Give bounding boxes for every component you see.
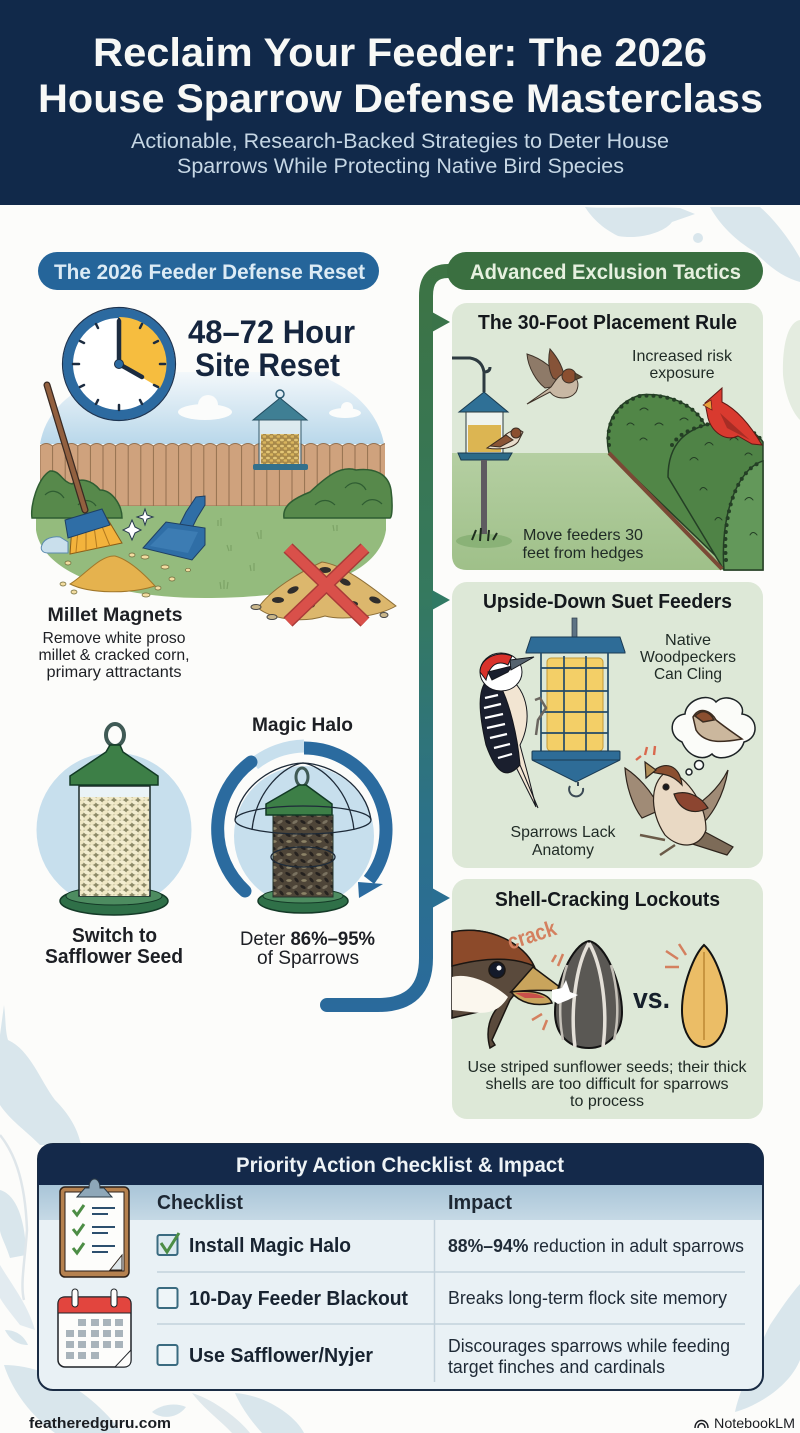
text: millet magnets: [38, 605, 190, 681]
heading: Shell-Cracking Lockouts: [495, 888, 720, 911]
labels: Move feeders 30: [523, 527, 643, 544]
sparkles: [123, 509, 153, 540]
illustration: backyard reset scene: [32, 372, 396, 622]
heading: magic halo: Magic Halo: [252, 715, 353, 736]
lawn: [452, 453, 763, 570]
sparrow head: [452, 930, 565, 1048]
caption: [468, 1059, 748, 1110]
perched sparrow: [487, 428, 523, 449]
suet feeder: [526, 618, 625, 796]
table header: Impact: [448, 1192, 512, 1214]
title: House Sparrow Defense Masterclass: [38, 77, 763, 121]
table header: [39, 1185, 762, 1220]
caption: Use striped sunflower seeds; their thick: [468, 1059, 748, 1076]
small hanging feeder: [253, 390, 308, 470]
row: install magic halo: [158, 1233, 744, 1257]
text: switch to safflower seed: Switch to: [72, 925, 157, 947]
labels: Woodpeckers: [640, 649, 736, 666]
illustration: safflower feeder: [36, 724, 192, 915]
row: safflower and nyjer: Discourages sparrows while feeding: [448, 1336, 730, 1356]
pale seed: [665, 944, 727, 1047]
heading: site reset: [188, 314, 355, 383]
panel: upside-down suet feeders: [452, 582, 763, 868]
row: safflower and nyjer: target finches and cardinals: [448, 1357, 665, 1377]
section pill: feeder defense reset: The 2026 Feeder Defense Reset: [54, 261, 365, 284]
text: millet magnets: Millet Magnets: [48, 605, 182, 626]
panel: 30-foot placement rule: [452, 303, 763, 570]
hanging feeder: [452, 358, 512, 548]
labels: [510, 632, 736, 859]
row: feeder blackout: 10-Day Feeder Blackout: [189, 1288, 408, 1310]
label: vs.: vs.: [633, 983, 670, 1015]
subtitle: Sparrows While Protecting Native Bird Species: [177, 154, 624, 178]
labels: Increased risk: [632, 348, 733, 365]
broom: [41, 385, 122, 554]
checklist title: Priority Action Checklist & Impact: [236, 1154, 564, 1177]
alarmed sparrow: [625, 746, 733, 855]
millet pile: [60, 553, 190, 597]
heading: Upside-Down Suet Feeders: [483, 590, 732, 613]
labels: Anatomy: [532, 842, 594, 859]
icon: calendar: [58, 1289, 131, 1367]
table header: Checklist: [157, 1192, 243, 1214]
subtitle: [131, 129, 669, 178]
labels: Can Cling: [654, 666, 722, 683]
row: install magic halo: 88%–94% reduction in adult sparrows: [448, 1236, 744, 1256]
text: deter percentage: of Sparrows: [257, 948, 359, 969]
caption: to process: [570, 1093, 644, 1110]
heading: The 30-Foot Placement Rule: [478, 311, 737, 334]
section pill: advanced exclusion tactics: Advanced Exclusion Tactics: [470, 261, 741, 284]
illustration: magic halo feeder: [218, 746, 386, 913]
text: millet magnets: primary attractants: [46, 664, 182, 681]
text: switch to safflower seed: Safflower Seed: [45, 946, 183, 968]
text: deter percentage: Deter 86%–95%: [240, 929, 375, 950]
section pill: advanced exclusion tactics: [447, 252, 763, 290]
heading: site reset: 48–72 Hour: [188, 314, 355, 350]
woodpecker: [480, 653, 546, 808]
bushes: [32, 469, 392, 518]
footer: website: featheredguru.com: [29, 1415, 171, 1432]
icon: clock: [62, 308, 176, 420]
text: millet magnets: millet & cracked corn,: [38, 647, 190, 664]
labels: [522, 348, 733, 562]
footer: notebooklm credit: NotebookLM: [714, 1415, 795, 1431]
crossed-out seed pile: [251, 548, 396, 622]
labels: Sparrows Lack: [510, 824, 616, 841]
section pill: feeder defense reset: [38, 252, 379, 290]
hedge: [607, 395, 763, 570]
panel: priority action checklist: [38, 1144, 763, 1390]
labels: Native: [665, 632, 711, 649]
connector arrow line: [327, 271, 455, 1005]
row: feeder blackout: [158, 1288, 727, 1310]
striped seed: [532, 941, 622, 1048]
dustpan: [143, 496, 205, 560]
cardinal: [703, 388, 762, 445]
title: Reclaim Your Feeder: The 2026: [93, 31, 707, 75]
text: switch to safflower seed: [45, 925, 183, 968]
grass tufts: [218, 518, 337, 589]
panel: shell-cracking lockouts: [452, 879, 763, 1119]
text: millet magnets: Remove white proso: [42, 630, 186, 647]
icon: clipboard: [60, 1179, 129, 1277]
labels: exposure: [650, 365, 715, 382]
flying sparrow: [527, 349, 582, 404]
subtitle: Actionable, Research-Backed Strategies to Deter House: [131, 129, 669, 153]
caption: shells are too difficult for sparrows: [486, 1076, 728, 1093]
title: [38, 31, 763, 121]
hedge scallops and leaves: [608, 396, 762, 560]
thought bubble: [672, 698, 755, 775]
wire halo: [235, 763, 371, 867]
row: safflower and nyjer: [158, 1336, 730, 1377]
row: install magic halo: Install Magic Halo: [189, 1235, 351, 1257]
row: feeder blackout: Breaks long-term flock site memory: [448, 1288, 727, 1308]
row: safflower and nyjer: Use Safflower/Nyjer: [189, 1345, 373, 1367]
labels: feet from hedges: [522, 545, 644, 562]
heading: site reset: Site Reset: [195, 347, 340, 383]
word: crack: crack: [504, 915, 560, 954]
header banner: [0, 0, 800, 205]
text: deter percentage: [240, 929, 375, 969]
